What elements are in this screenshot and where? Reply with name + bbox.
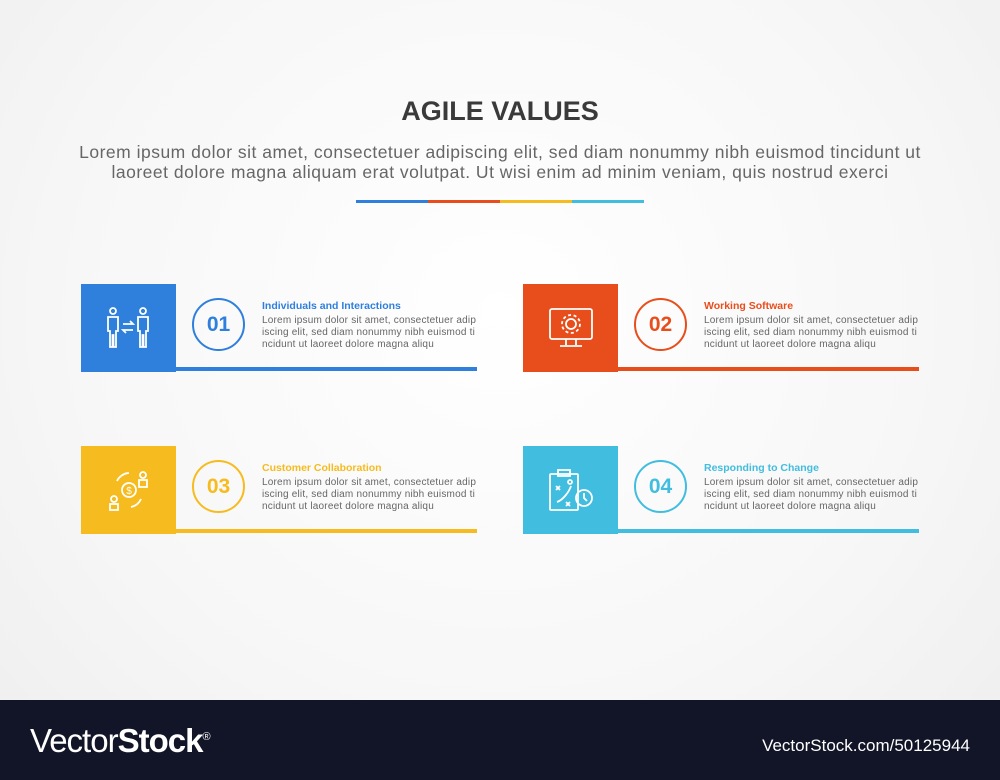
text: ncidunt ut laoreet dolore magna aliqu <box>704 339 876 350</box>
text: ncidunt ut laoreet dolore magna aliqu <box>704 501 876 512</box>
text: Lorem ipsum dolor sit amet, consectetuer adip <box>262 315 476 326</box>
card 4 <box>523 446 919 534</box>
subtitle: Lorem ipsum dolor sit amet, consectetuer adipiscing elit, sed diam nonummy nibh euismod tincidunt ut <box>79 142 921 162</box>
logo: VectorStock® <box>30 722 210 759</box>
text: Lorem ipsum dolor sit amet, consectetuer adip <box>704 477 918 488</box>
icon: monitor gear <box>523 284 618 372</box>
card 1 <box>81 284 477 372</box>
icon: customer cycle: $ <box>126 486 132 497</box>
color divider <box>356 200 644 203</box>
title: AGILE VALUES <box>401 96 599 126</box>
text: Lorem ipsum dolor sit amet, consectetuer adip <box>704 315 918 326</box>
text: iscing elit, sed diam nonummy nibh euismod ti <box>704 327 917 338</box>
text <box>262 315 476 350</box>
icon: people <box>81 284 176 372</box>
number 01 <box>192 298 245 351</box>
subtitle: laoreet dolore magna aliquam erat volutpat. Ut wisi enim ad minim veniam, quis nostrud exerci <box>112 162 888 182</box>
heading: Individuals and Interactions <box>262 300 401 312</box>
text: ncidunt ut laoreet dolore magna aliqu <box>262 339 434 350</box>
heading: Responding to Change <box>704 462 819 474</box>
text: iscing elit, sed diam nonummy nibh euismod ti <box>262 327 475 338</box>
text <box>704 477 918 512</box>
text <box>704 315 918 350</box>
number 04 <box>634 460 687 513</box>
number 03 <box>192 460 245 513</box>
icon: customer cycle <box>81 446 176 534</box>
text: ncidunt ut laoreet dolore magna aliqu <box>262 501 434 512</box>
text: Lorem ipsum dolor sit amet, consectetuer adip <box>262 477 476 488</box>
heading: Working Software <box>704 300 793 312</box>
subtitle <box>79 142 921 182</box>
number 01: 01 <box>207 312 230 336</box>
text: iscing elit, sed diam nonummy nibh euismod ti <box>262 489 475 500</box>
card 2 <box>523 284 919 372</box>
text: iscing elit, sed diam nonummy nibh euismod ti <box>704 489 917 500</box>
heading: Customer Collaboration <box>262 462 382 474</box>
footer <box>0 700 1000 780</box>
number 03: 03 <box>207 474 230 498</box>
number 02 <box>634 298 687 351</box>
card 3 <box>81 446 477 534</box>
url: VectorStock.com/50125944 <box>762 736 970 755</box>
icon: clipboard clock <box>523 446 618 534</box>
number 04: 04 <box>649 474 672 498</box>
number 02: 02 <box>649 312 672 336</box>
text <box>262 477 476 512</box>
